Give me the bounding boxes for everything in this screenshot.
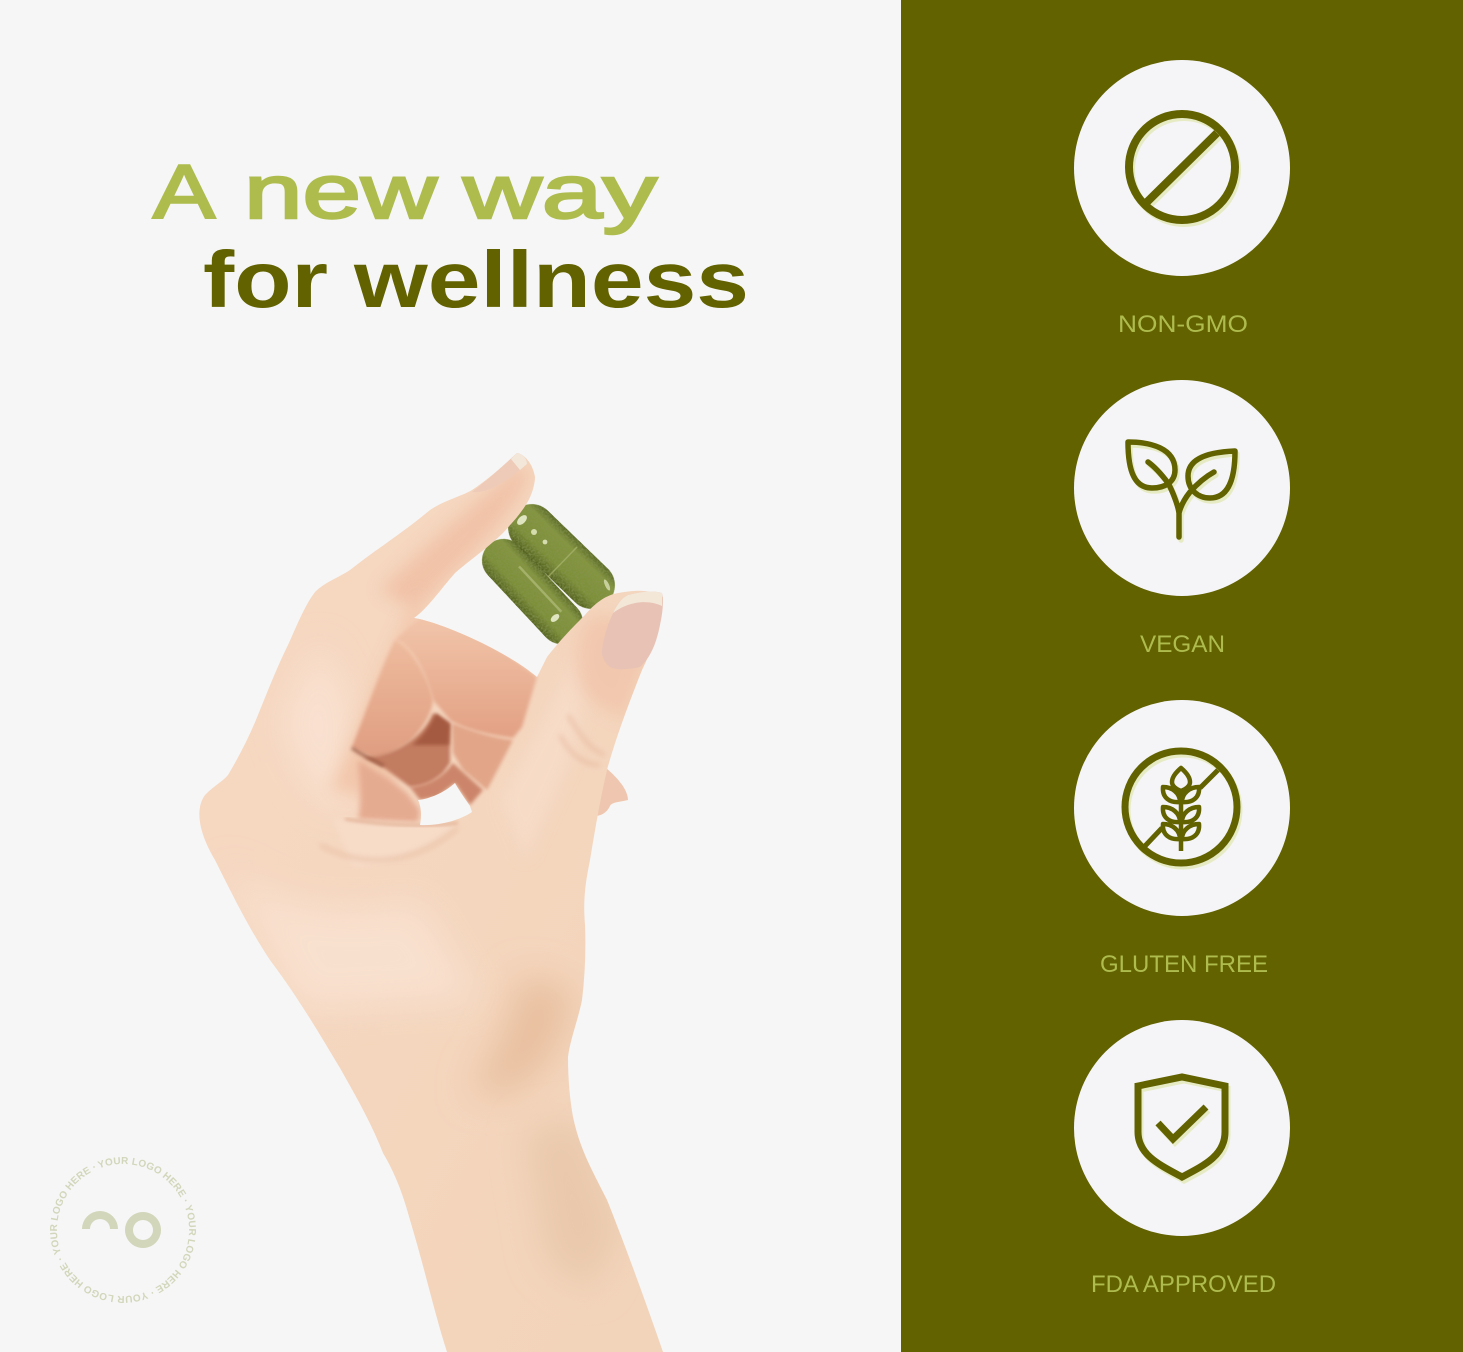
title (153, 150, 749, 324)
logo ring mark (125, 1212, 161, 1248)
capsule: lower (473, 530, 592, 653)
logo circular text: YOUR LOGO HERE · YOUR LOGO HERE · YOUR LOGO HERE · YOUR LOGO HERE · (50, 1157, 196, 1303)
badge: gluten free (1074, 700, 1290, 978)
title line 2: for (203, 235, 328, 324)
label: GLUTEN FREE (1100, 951, 1268, 978)
circle (1074, 60, 1290, 276)
hand silhouette (199, 453, 663, 1352)
label: FDA APPROVED (1091, 1271, 1276, 1298)
badge: FDA approved (1074, 1020, 1290, 1298)
capsule: upper (498, 494, 625, 619)
label: VEGAN (1140, 631, 1225, 658)
title line 2: wellness (353, 235, 749, 324)
badge: vegan (1074, 380, 1290, 658)
title line 2 (203, 235, 749, 324)
title line 1: new (244, 150, 439, 235)
panel: right green column (901, 0, 1463, 1352)
icon: sprout (1128, 442, 1237, 540)
logo arc mark (82, 1211, 118, 1229)
hand shading (220, 465, 650, 1290)
circle (1074, 1020, 1290, 1236)
icon: prohibition sign (1129, 114, 1237, 223)
folded finger tip behind thumb (594, 768, 628, 816)
icon: crossed-out wheat (1125, 751, 1239, 866)
circle (1074, 700, 1290, 916)
icon: shield with check (1138, 1077, 1227, 1180)
title line 1 (153, 150, 657, 235)
badge: non-GMO (1074, 60, 1290, 338)
thumb nail (602, 592, 663, 669)
title line 1: A (153, 150, 215, 235)
index finger nail (472, 453, 527, 492)
circle (1074, 380, 1290, 596)
logo badge (50, 1157, 196, 1303)
label: NON-GMO (1118, 311, 1248, 338)
photo: hand holding two capsules (199, 453, 663, 1352)
gap between fingers and palm (418, 783, 472, 825)
title line 1: way (462, 150, 657, 235)
